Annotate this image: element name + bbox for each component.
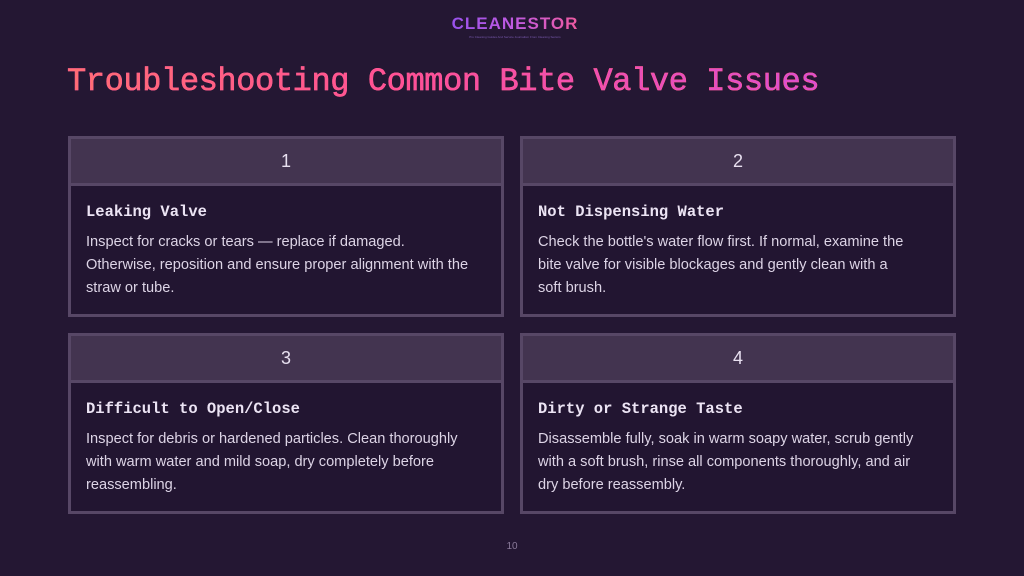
- logo: CLEANESTOR: [452, 14, 578, 33]
- card 2 text: Check the bottle's water flow first. If normal, examine the: [538, 234, 903, 250]
- card 2 text: [538, 234, 903, 296]
- card 1 header: 1: [281, 151, 291, 171]
- card 2 header: 2: [733, 151, 743, 171]
- card 1 text: Inspect for cracks or tears — replace if damaged.: [86, 234, 405, 250]
- card 1 text: Otherwise, reposition and ensure proper alignment with the straw or tube.: [86, 257, 468, 296]
- card 1 header: [71, 139, 501, 186]
- card 1: [68, 136, 504, 317]
- card 3 header: 3: [281, 348, 291, 368]
- card 3 heading: Difficult to Open/Close: [86, 400, 300, 418]
- card 4 text: Disassemble fully, soak in warm soapy water, scrub gently with a soft brush, rinse all components thoroughly, and air dry before reassembly.: [538, 431, 913, 493]
- page number: 10: [506, 541, 518, 552]
- card 4 header: 4: [733, 348, 743, 368]
- title: Troubleshooting Common Bite Valve Issues: [67, 63, 819, 100]
- card 3: [68, 333, 504, 514]
- card 2: [520, 136, 956, 317]
- card 2 header: [523, 139, 953, 186]
- card 2 text: bite valve for visible blockages and gently clean with a: [538, 257, 888, 273]
- logo: Pro Cleaning Guides And Service Journalism From Cleaning Sectors: [469, 35, 561, 39]
- card 3 header: [71, 336, 501, 383]
- card 2 text: soft brush.: [538, 280, 606, 296]
- card 1 text: [86, 234, 468, 296]
- card 3 text: Inspect for debris or hardened particles. Clean thoroughly with warm water and mild soap, dry completely before reassembling.: [86, 431, 458, 493]
- card 4 heading: Dirty or Strange Taste: [538, 400, 743, 418]
- card 4 header: [523, 336, 953, 383]
- card 2 heading: Not Dispensing Water: [538, 203, 724, 221]
- card 1 heading: Leaking Valve: [86, 203, 207, 221]
- card 4: [520, 333, 956, 514]
